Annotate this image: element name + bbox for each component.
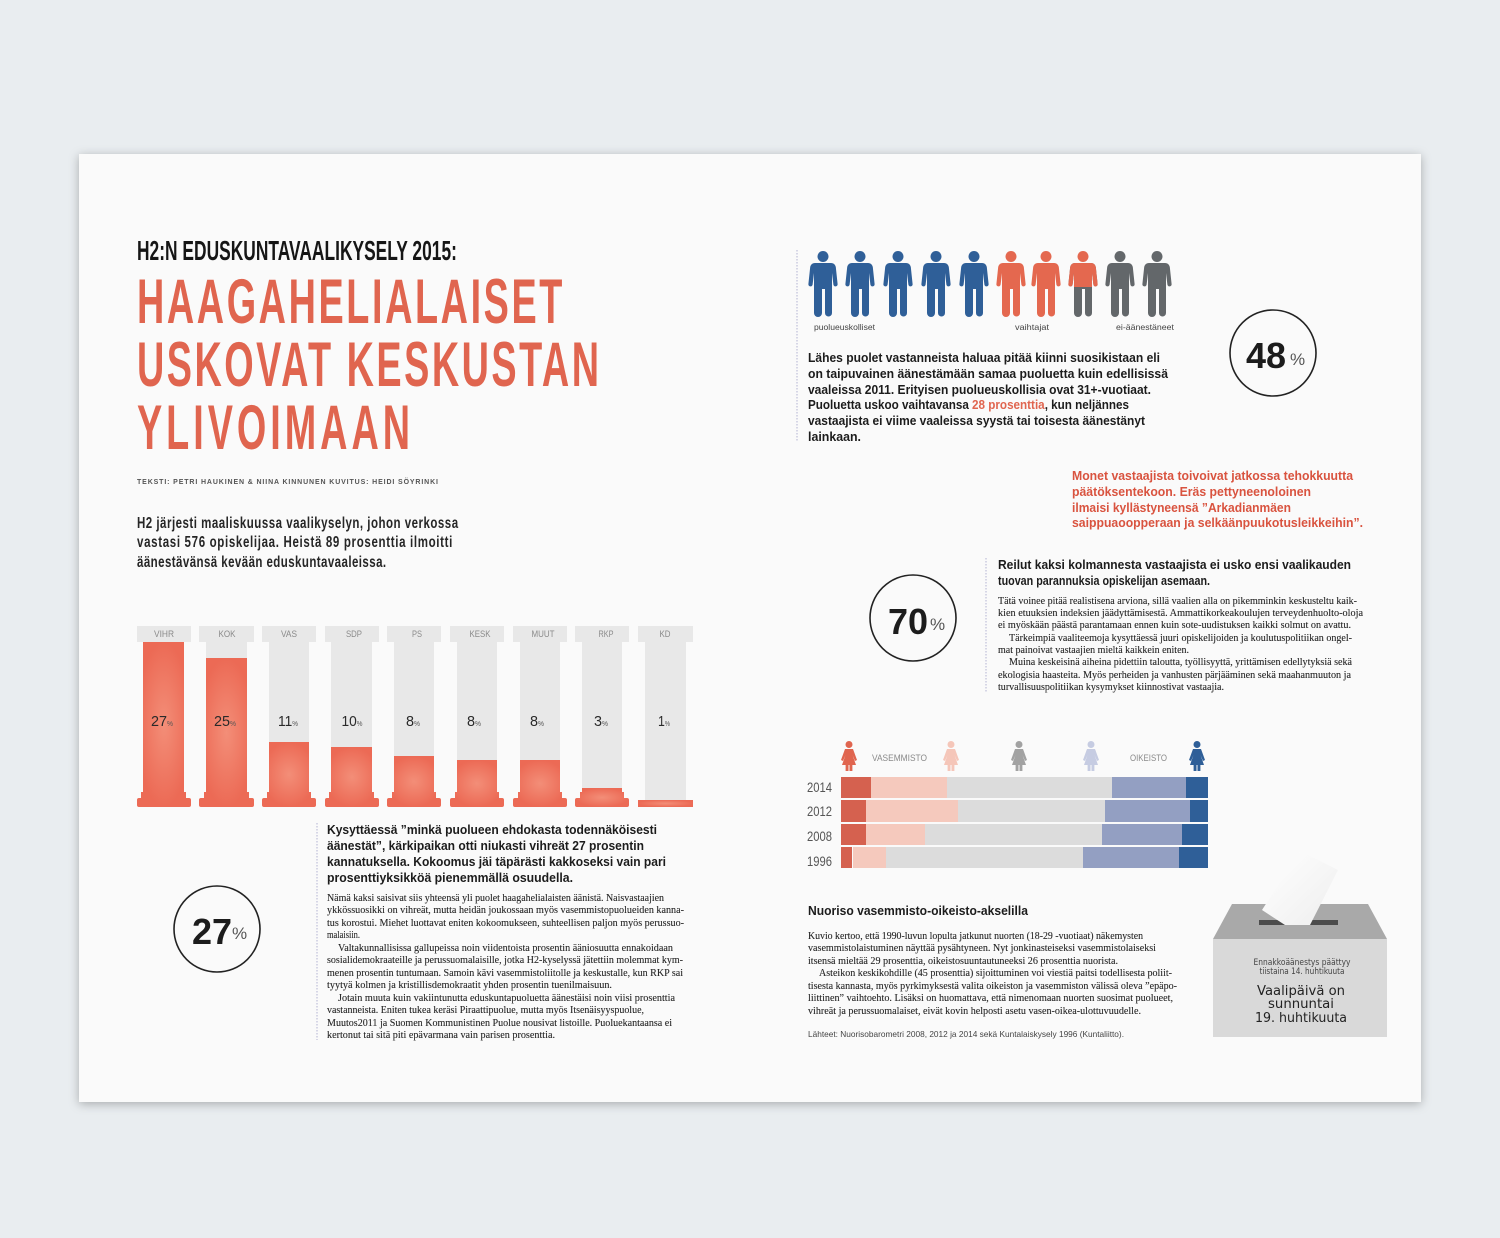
column: KD 1%	[638, 626, 693, 807]
paragraph: voter loyalty	[808, 351, 1168, 444]
main heading	[137, 267, 599, 464]
column: RKP 3%: RKP	[598, 629, 614, 639]
row: 2008	[807, 824, 1208, 845]
column: MUUT 8%: 8%	[530, 713, 544, 730]
pictogram captions: ei-äänestäneet	[1116, 322, 1175, 332]
pull quote: Monet vastaajista toivoivat jatkossa tehokkuutta	[1072, 469, 1354, 483]
body text: youth axis: tisesta kannasta, myös pyrkimyksestä valita oikeiston ja vasemmiston välissä oleva ”epäpo-	[808, 981, 1177, 992]
column: RKP 3%: 3%	[594, 713, 608, 730]
pictogram captions: vaihtajat	[1015, 322, 1050, 332]
lead paragraph: 70%: tuovan parannuksia opiskelijan asemaan.	[998, 574, 1210, 588]
paragraph: voter loyalty: Lähes puolet vastanneista haluaa pitää kiinni suosikistaan eli	[808, 351, 1160, 365]
body text: party results	[327, 893, 684, 1041]
lead paragraph: 27%: Kysyttäessä ”minkä puolueen ehdokasta todennäköisesti	[327, 823, 657, 837]
body text: party results: ykkössuosikki on vihreät, mutta heidän joukossaan myös vasemmistopuolueiden kanna-	[327, 905, 684, 916]
pictogram captions	[814, 322, 1175, 332]
body text: youth axis: itsensä mieltää 29 prosenttia, oikeistosuuntautuneeksi 26 prosenttia nuorista.	[808, 956, 1118, 967]
body text: party results: tyytyä kolmen ja kristillisdemokraatit yhden prosentin tuenilmaisuun.	[327, 980, 612, 991]
icon: non-voters (grey)	[1105, 251, 1172, 317]
bar chart: party support columns	[137, 626, 693, 807]
column: VIHR 27%: 27%	[151, 713, 173, 730]
stacked bar chart: left-right axis	[807, 741, 1208, 869]
dotted rule: top right	[796, 250, 798, 442]
kicker heading: H2:N EDUSKUNTAVAALIKYSELY 2015:	[137, 235, 457, 266]
body text: election themes: Muina keskeisinä aiheina pidettiin taloutta, työllisyyttä, yrittämisen edellytyksiä sekä	[1009, 657, 1353, 668]
body text: party results: Muutos2011 ja Suomen Kommunistinen Puolue nousivat listoille. Puoluekantaansa ei	[327, 1018, 672, 1029]
heading: youth axis: Nuoriso vasemmisto-oikeisto-akselilla	[808, 904, 1029, 918]
body text: party results: menen prosentin tuntumaan. Samoin kävi vasemmistoliitolle ja keskustalle, kun RKP sai	[327, 968, 683, 979]
box lid	[1213, 904, 1387, 939]
box text: tiistaina 14. huhtikuuta	[1260, 967, 1344, 977]
body text: youth axis: vasemmistolaistuminen näyttää pysähtyneen. Nyt jonkinasteiseksi vasemmistolaiseksi	[808, 943, 1156, 954]
box text	[1254, 958, 1350, 1026]
body text: party results: Valtakunnallisissa gallupeissa noin viidentoista prosentin ääniosuutta ennakoidaan	[338, 943, 673, 954]
intro text: H2 järjesti maaliskuussa vaalikyselyn, johon verkossa	[137, 513, 458, 531]
body text: party results: malaisiin.	[327, 930, 360, 941]
column: SDP 10%: SDP	[346, 629, 362, 639]
body text: party results: sosialidemokraateille ja perussuomalaisille, jotka H2-kyselyssä jätettiin molemmat kym-	[327, 955, 683, 966]
ballot slot	[1259, 920, 1338, 925]
row: 1996	[807, 847, 1208, 869]
intro text	[137, 513, 458, 570]
column: KD 1%: 1%	[658, 713, 670, 730]
pull quote: ilmaisi kyllästyneensä ”Arkadianmäen	[1072, 501, 1291, 515]
axis icons and labels	[841, 741, 1205, 771]
callout: 70%: %	[930, 615, 945, 634]
row: 2008: 2008	[807, 828, 832, 844]
callout: 27%	[174, 886, 260, 972]
box text: sunnuntai	[1268, 996, 1334, 1012]
paragraph: voter loyalty: vastaajista ei viime vaaleissa syystä tai toisesta äänestänyt	[808, 414, 1146, 428]
body text: election themes: Tärkeimpiä vaaliteemoja kysyttäessä juuri opiskelijoiden ja koulutuspolitiikan ongel-	[1009, 633, 1352, 644]
body text: party results: kertonut tai sitä piti epävarmana vain parisen prosenttia.	[327, 1030, 555, 1041]
icon: switchers (red)	[996, 251, 1061, 317]
row: 2012: 2012	[807, 803, 832, 819]
column: KESK 8%: KESK	[470, 629, 490, 639]
ballot box	[1213, 851, 1387, 1037]
body text: election themes: ei myöskään päästä parantamaan ennen kuin sote-uudistuksen kaikki solmut on avattu.	[998, 620, 1351, 631]
paragraph: voter loyalty: lainkaan.	[808, 430, 861, 444]
page sheet	[79, 154, 1421, 1102]
intro text: äänestävänsä kevään eduskuntavaaleissa.	[137, 552, 386, 570]
paragraph: voter loyalty: Puoluetta uskoo vaihtavansa 28 prosenttia, kun neljännes	[808, 398, 1129, 412]
intro text: vastasi 576 opiskelijaa. Heistä 89 prosenttia ilmoitti	[137, 532, 452, 550]
column: KESK 8%: 8%	[467, 713, 481, 730]
column: PS 8%: PS	[412, 629, 422, 639]
body text: election themes: kien etuuksien indeksien jäädyttämisestä. Ammattikorkeakoulujen terveydenhuolto-oloja	[998, 608, 1364, 619]
callout: 48%: %	[1290, 350, 1305, 369]
body text: election themes: mat painoivat vastaajien mieltä kaikkein eniten.	[998, 645, 1189, 656]
column: KESK 8%	[450, 626, 504, 807]
body text: election themes: ekologisia haasteita. Myös perheiden ja vanhusten pärjääminen sekä maahanmuuton ja	[998, 670, 1352, 681]
column: SDP 10%	[325, 626, 379, 807]
column: VIHR 27%	[137, 626, 191, 807]
column: VAS 11%: VAS	[281, 629, 297, 639]
body text: youth axis: vihreät ja perussuomalaiset, eivät kovin helposti asetu vasen-oikea-ulottuvuudelle.	[808, 1006, 1141, 1017]
body text: election themes: Tätä voinee pitää realistisena arviona, sillä vaalien alla on pikemminkin keskusteltu kaik-	[998, 596, 1357, 607]
column: KOK 25%: 25%	[214, 713, 236, 730]
row: 2014	[807, 777, 1208, 798]
body text: party results: vastanneista. Eniten tukea keräsi Piraattipuolue, mutta myös Itsenäisyyspuolue,	[327, 1005, 644, 1016]
callout: 27%: 27	[192, 911, 232, 952]
body text: party results: tus korostui. Miehet luottavat eniten kokoomukseen, suhteellisen paljon myös perussuo-	[327, 918, 684, 929]
column: VAS 11%: 11%	[278, 713, 298, 730]
body text: party results: Nämä kaksi saisivat siis yhteensä yli puolet haagahelialaisten äänistä. Naisvastaajien	[327, 893, 664, 904]
pull quote	[1072, 469, 1363, 530]
dotted rule: left article	[316, 823, 318, 1040]
box text: Ennakkoäänestys päättyy	[1254, 958, 1350, 968]
dotted rule: 70% article	[985, 558, 987, 692]
lead paragraph: 27%	[327, 823, 666, 885]
callout: 48%: 48	[1246, 335, 1286, 376]
row: 2012	[807, 800, 1208, 822]
column: RKP 3%	[575, 626, 629, 807]
box front	[1213, 939, 1387, 1037]
main heading: HAAGAHELIALAISET	[137, 267, 563, 338]
column: PS 8%: 8%	[406, 713, 420, 730]
column: KOK 25%	[199, 626, 254, 807]
column: MUUT 8%: MUUT	[532, 629, 555, 639]
title block	[137, 235, 599, 464]
paragraph: voter loyalty: on taipuvainen äänestämään samaa puoluetta kuin edellisissä	[808, 367, 1168, 381]
body text: youth axis	[808, 931, 1177, 1017]
axis icons and labels: OIKEISTO	[1130, 753, 1167, 763]
pull quote: päätöksentekoon. Eräs pettyneenoloinen	[1072, 485, 1311, 499]
pictogram: ten voters	[808, 251, 1175, 332]
column: PS 8%	[387, 626, 441, 807]
callout: 48%	[1230, 310, 1316, 396]
callout: 70%	[870, 575, 956, 661]
icon: loyal voters (blue)	[808, 251, 989, 317]
byline: TEKSTI: PETRI HAUKINEN & NIINA KINNUNEN KUVITUS: HEIDI SÖYRINKI	[137, 477, 438, 486]
row: 2014: 2014	[807, 779, 832, 795]
pull quote: saippuaoopperaan ja selkäänpuukotusleikkeihin”.	[1072, 516, 1363, 530]
body text: youth axis: Kuvio kertoo, että 1990-luvun lopulta jatkunut nuorten (18-29 -vuotiaat) näkemysten	[808, 931, 1143, 942]
callout: 27%: %	[232, 924, 247, 943]
lead paragraph: 27%: äänestät”, kärkipaikan otti niukasti vihreät 27 prosentin	[327, 839, 644, 853]
pictogram captions: puolueuskolliset	[814, 322, 876, 332]
column: VIHR 27%: VIHR	[154, 629, 174, 639]
body text: election themes: turvallisuuspolitiikan kysymykset kiinnostivat vastaajia.	[998, 682, 1224, 693]
body text: youth axis: liittinen” vaihtoehto. Lisäksi on huomattava, että nimenomaan nuorten suosimat puolueet,	[808, 993, 1173, 1004]
column: SDP 10%: 10%	[342, 713, 362, 730]
box text: Vaalipäivä on	[1257, 983, 1345, 999]
row: 1996: 1996	[807, 853, 832, 869]
column: VAS 11%	[262, 626, 316, 807]
main heading: USKOVAT KESKUSTAN	[137, 330, 599, 401]
icon: split figure, red and grey	[1068, 251, 1098, 317]
lead paragraph: 70%	[998, 558, 1351, 588]
body text: election themes	[998, 596, 1364, 693]
box text: 19. huhtikuuta	[1255, 1010, 1347, 1026]
paragraph: voter loyalty: vaaleissa 2011. Erityisen puolueuskollisia ovat 31+-vuotiaat.	[808, 383, 1151, 397]
column: KOK 25%: KOK	[218, 629, 236, 639]
axis icons and labels: VASEMMISTO	[872, 753, 927, 763]
column: KD 1%: KD	[660, 629, 671, 639]
main heading: YLIVOIMAAN	[137, 393, 410, 464]
body text: youth axis: Asteikon keskikohdille (45 prosenttia) sijoittuminen voi viestiä paitsi todellisesta poliit-	[819, 968, 1172, 979]
body text: party results: Jotain muuta kuin vakiintunutta eduskuntapuoluetta äänestäisi noin viisi prosenttia	[338, 993, 676, 1004]
callout: 70%: 70	[888, 601, 928, 642]
source note: Lähteet: Nuorisobarometri 2008, 2012 ja 2014 sekä Kuntalaiskysely 1996 (Kuntaliitto).	[808, 1029, 1124, 1039]
lead paragraph: 70%: Reilut kaksi kolmannesta vastaajista ei usko ensi vaalikauden	[998, 558, 1351, 572]
lead paragraph: 27%: kannatuksella. Kokoomus jäi täpärästi kakkoseksi vain pari	[327, 855, 666, 869]
lead paragraph: 27%: prosenttiyksikköä pienemmällä osuudella.	[327, 871, 573, 885]
column: MUUT 8%	[513, 626, 567, 807]
ballot paper	[1262, 851, 1338, 925]
